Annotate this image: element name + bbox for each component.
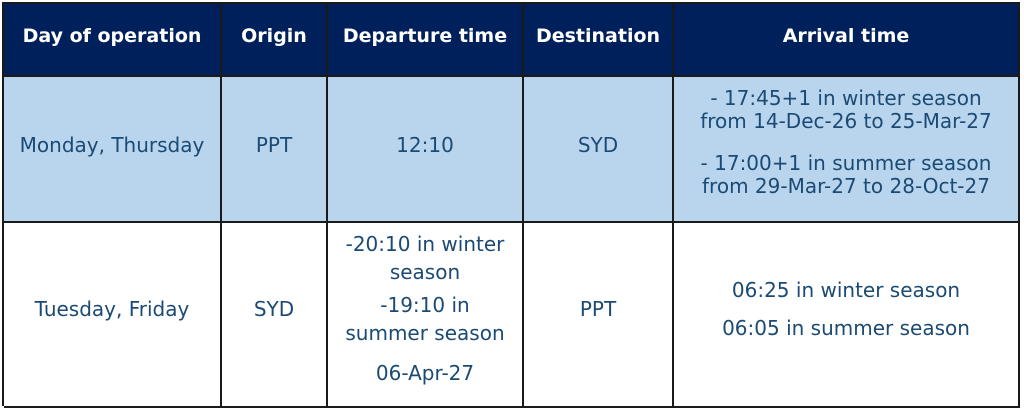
header: departure time: Departure time bbox=[343, 25, 507, 47]
row 2 departure: -20:10 in winter bbox=[346, 232, 504, 256]
row 1 destination: SYD bbox=[578, 132, 618, 156]
row 1 arrival: - 17:45+1 in winter season bbox=[710, 86, 982, 110]
row 1 arrival bbox=[674, 77, 1020, 223]
row 2 destination bbox=[524, 223, 674, 408]
header: origin: Origin bbox=[241, 25, 307, 47]
row 1 day bbox=[4, 77, 222, 223]
row 2 origin: SYD bbox=[254, 296, 294, 320]
row 2 departure: season bbox=[390, 260, 460, 284]
row 2 day bbox=[4, 223, 222, 408]
row 2 departure: summer season bbox=[345, 321, 505, 345]
row 2 arrival: 06:05 in summer season bbox=[722, 316, 970, 340]
header: arrival time bbox=[674, 4, 1020, 77]
row 1 origin: PPT bbox=[256, 132, 292, 156]
row 2 arrival: 06:25 in winter season bbox=[732, 278, 960, 302]
row 2 departure: 06-Apr-27 bbox=[376, 361, 474, 385]
row 2 departure bbox=[328, 223, 524, 408]
header: departure time bbox=[328, 4, 524, 77]
row 1 departure bbox=[328, 77, 524, 223]
header: day of operation bbox=[4, 4, 222, 77]
row 2 day: Tuesday, Friday bbox=[35, 296, 189, 320]
row 1 origin bbox=[222, 77, 328, 223]
header: origin bbox=[222, 4, 328, 77]
header: destination bbox=[524, 4, 674, 77]
row 1 arrival: - 17:00+1 in summer season bbox=[701, 150, 991, 174]
header: arrival time: Arrival time bbox=[783, 25, 909, 47]
row 2 origin bbox=[222, 223, 328, 408]
row 1 arrival: from 29-Mar-27 to 28-Oct-27 bbox=[702, 174, 990, 198]
header: destination: Destination bbox=[536, 25, 660, 47]
row 2 destination: PPT bbox=[580, 296, 616, 320]
row 1 departure: 12:10 bbox=[396, 132, 454, 156]
row 1 arrival: from 14-Dec-26 to 25-Mar-27 bbox=[700, 108, 992, 132]
row 2 arrival bbox=[674, 223, 1020, 408]
row 1 day: Monday, Thursday bbox=[20, 132, 204, 156]
row 2 departure: -19:10 in bbox=[380, 293, 470, 317]
header: day of operation: Day of operation bbox=[23, 25, 201, 47]
row 1 destination bbox=[524, 77, 674, 223]
